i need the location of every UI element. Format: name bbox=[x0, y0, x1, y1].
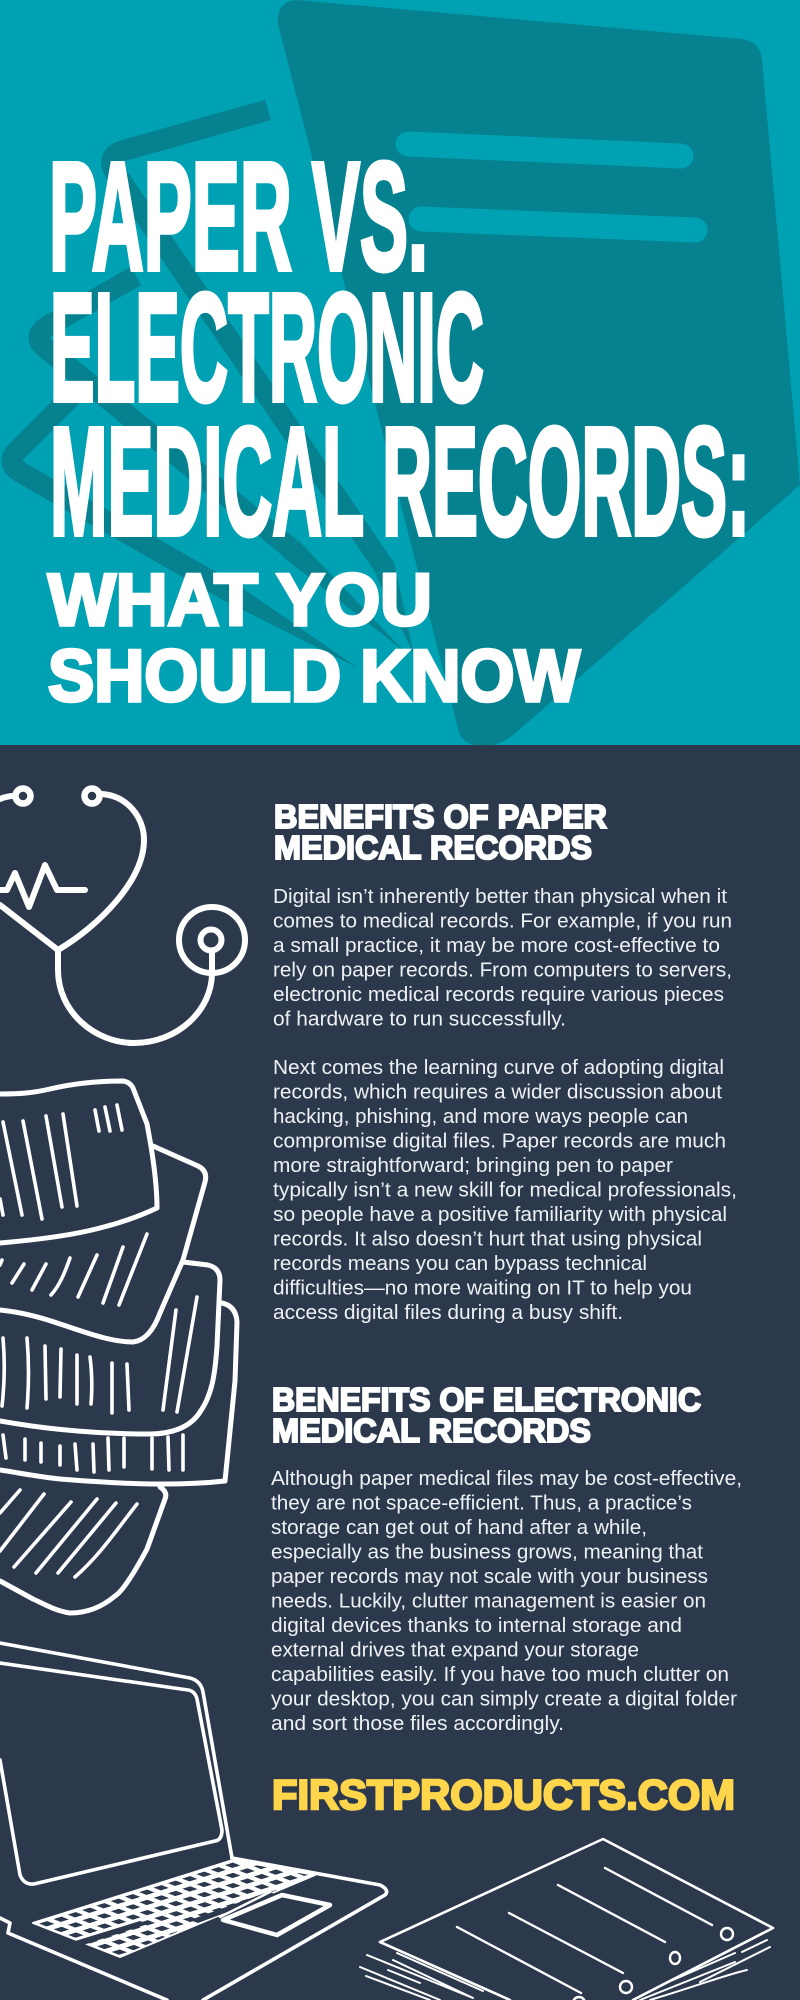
text block: electronic paragraph: they are not space-efficient. Thus, a practice’s bbox=[271, 1492, 692, 1514]
text block: paper paragraph 1: comes to medical records. For example, if you run bbox=[273, 910, 732, 932]
text block: paper paragraph 2: records means you can bypass technical bbox=[273, 1253, 647, 1275]
heading: benefits of paper: BENEFITS OF PAPER bbox=[274, 798, 607, 835]
text block: electronic paragraph: Although paper medical files may be cost-effective, bbox=[271, 1468, 742, 1490]
text block: paper paragraph 2: records. It also doesn’t hurt that using physical bbox=[273, 1228, 702, 1250]
subtitle bbox=[48, 560, 580, 717]
text block: electronic paragraph: external drives that expand your storage bbox=[271, 1640, 639, 1662]
text block: electronic paragraph: needs. Luckily, clutter management is easier on bbox=[271, 1590, 706, 1612]
text block: paper paragraph 2: so people have a positive familiarity with physical bbox=[273, 1204, 727, 1226]
keyboard bbox=[33, 1860, 315, 1957]
text block: electronic paragraph: your desktop, you can simply create a digital folder bbox=[271, 1688, 737, 1710]
panel: dark body bbox=[0, 745, 800, 2000]
text block: paper paragraph 2: Next comes the learning curve of adopting digital bbox=[273, 1057, 724, 1079]
text block: paper paragraph 2: compromise digital files. Paper records are much bbox=[273, 1130, 726, 1152]
text block: paper paragraph 1: rely on paper records. From computers to servers, bbox=[273, 960, 732, 982]
touchpad bbox=[220, 1892, 330, 1935]
heading: benefits of paper bbox=[274, 798, 607, 866]
website url: FIRSTPRODUCTS.COM bbox=[272, 1771, 735, 1818]
heading: benefits of paper: MEDICAL RECORDS bbox=[274, 829, 592, 866]
text block: electronic paragraph: paper records may not scale with your business bbox=[271, 1566, 708, 1588]
subtitle: SHOULD KNOW bbox=[48, 636, 580, 717]
text block: electronic paragraph bbox=[271, 1468, 742, 1735]
text block: paper paragraph 2: access digital files during a busy shift. bbox=[273, 1302, 623, 1324]
icon: laptop bbox=[0, 1643, 387, 2000]
text block: electronic paragraph: especially as the business grows, meaning that bbox=[271, 1542, 703, 1564]
text block: electronic paragraph: digital devices thanks to internal storage and bbox=[271, 1615, 682, 1637]
icon: paper document sheets bbox=[360, 1839, 773, 2000]
heading: benefits of electronic bbox=[272, 1381, 701, 1449]
text block: paper paragraph 2: typically isn’t a new skill for medical professionals, bbox=[273, 1180, 737, 1202]
subtitle: WHAT YOU bbox=[48, 560, 432, 641]
text block: paper paragraph 2: more straightforward; bringing pen to paper bbox=[273, 1155, 673, 1177]
text block: paper paragraph 2: hacking, phishing, and more ways people can bbox=[273, 1106, 688, 1128]
text block: paper paragraph 2: difficulties—no more waiting on IT to help you bbox=[273, 1278, 692, 1300]
text block: electronic paragraph: and sort those files accordingly. bbox=[271, 1713, 564, 1735]
text block: paper paragraph 2 bbox=[273, 1057, 737, 1324]
text block: electronic paragraph: capabilities easily. If you have too much clutter on bbox=[271, 1664, 729, 1686]
text block: paper paragraph 1: electronic medical records require various pieces bbox=[273, 984, 724, 1006]
heading: benefits of electronic: BENEFITS OF ELECTRONIC bbox=[272, 1381, 701, 1418]
icon: stethoscope bbox=[0, 788, 245, 1043]
text block: paper paragraph 1: of hardware to run successfully. bbox=[273, 1008, 566, 1030]
panel: teal header bbox=[0, 0, 800, 746]
title bbox=[49, 130, 750, 568]
text block: electronic paragraph: storage can get out of hand after a while, bbox=[271, 1517, 647, 1539]
text block: paper paragraph 1 bbox=[273, 886, 732, 1030]
icon: stack of paper records bbox=[0, 1081, 237, 1613]
text block: paper paragraph 1: Digital isn’t inherently better than physical when it bbox=[273, 886, 727, 908]
icon: background paper sheets bbox=[12, 0, 800, 746]
text block: paper paragraph 1: a small practice, it may be more cost-effective to bbox=[273, 935, 720, 957]
text block: paper paragraph 2: records, which requires a wider discussion about bbox=[273, 1082, 722, 1104]
heading: benefits of electronic: MEDICAL RECORDS bbox=[272, 1412, 591, 1449]
